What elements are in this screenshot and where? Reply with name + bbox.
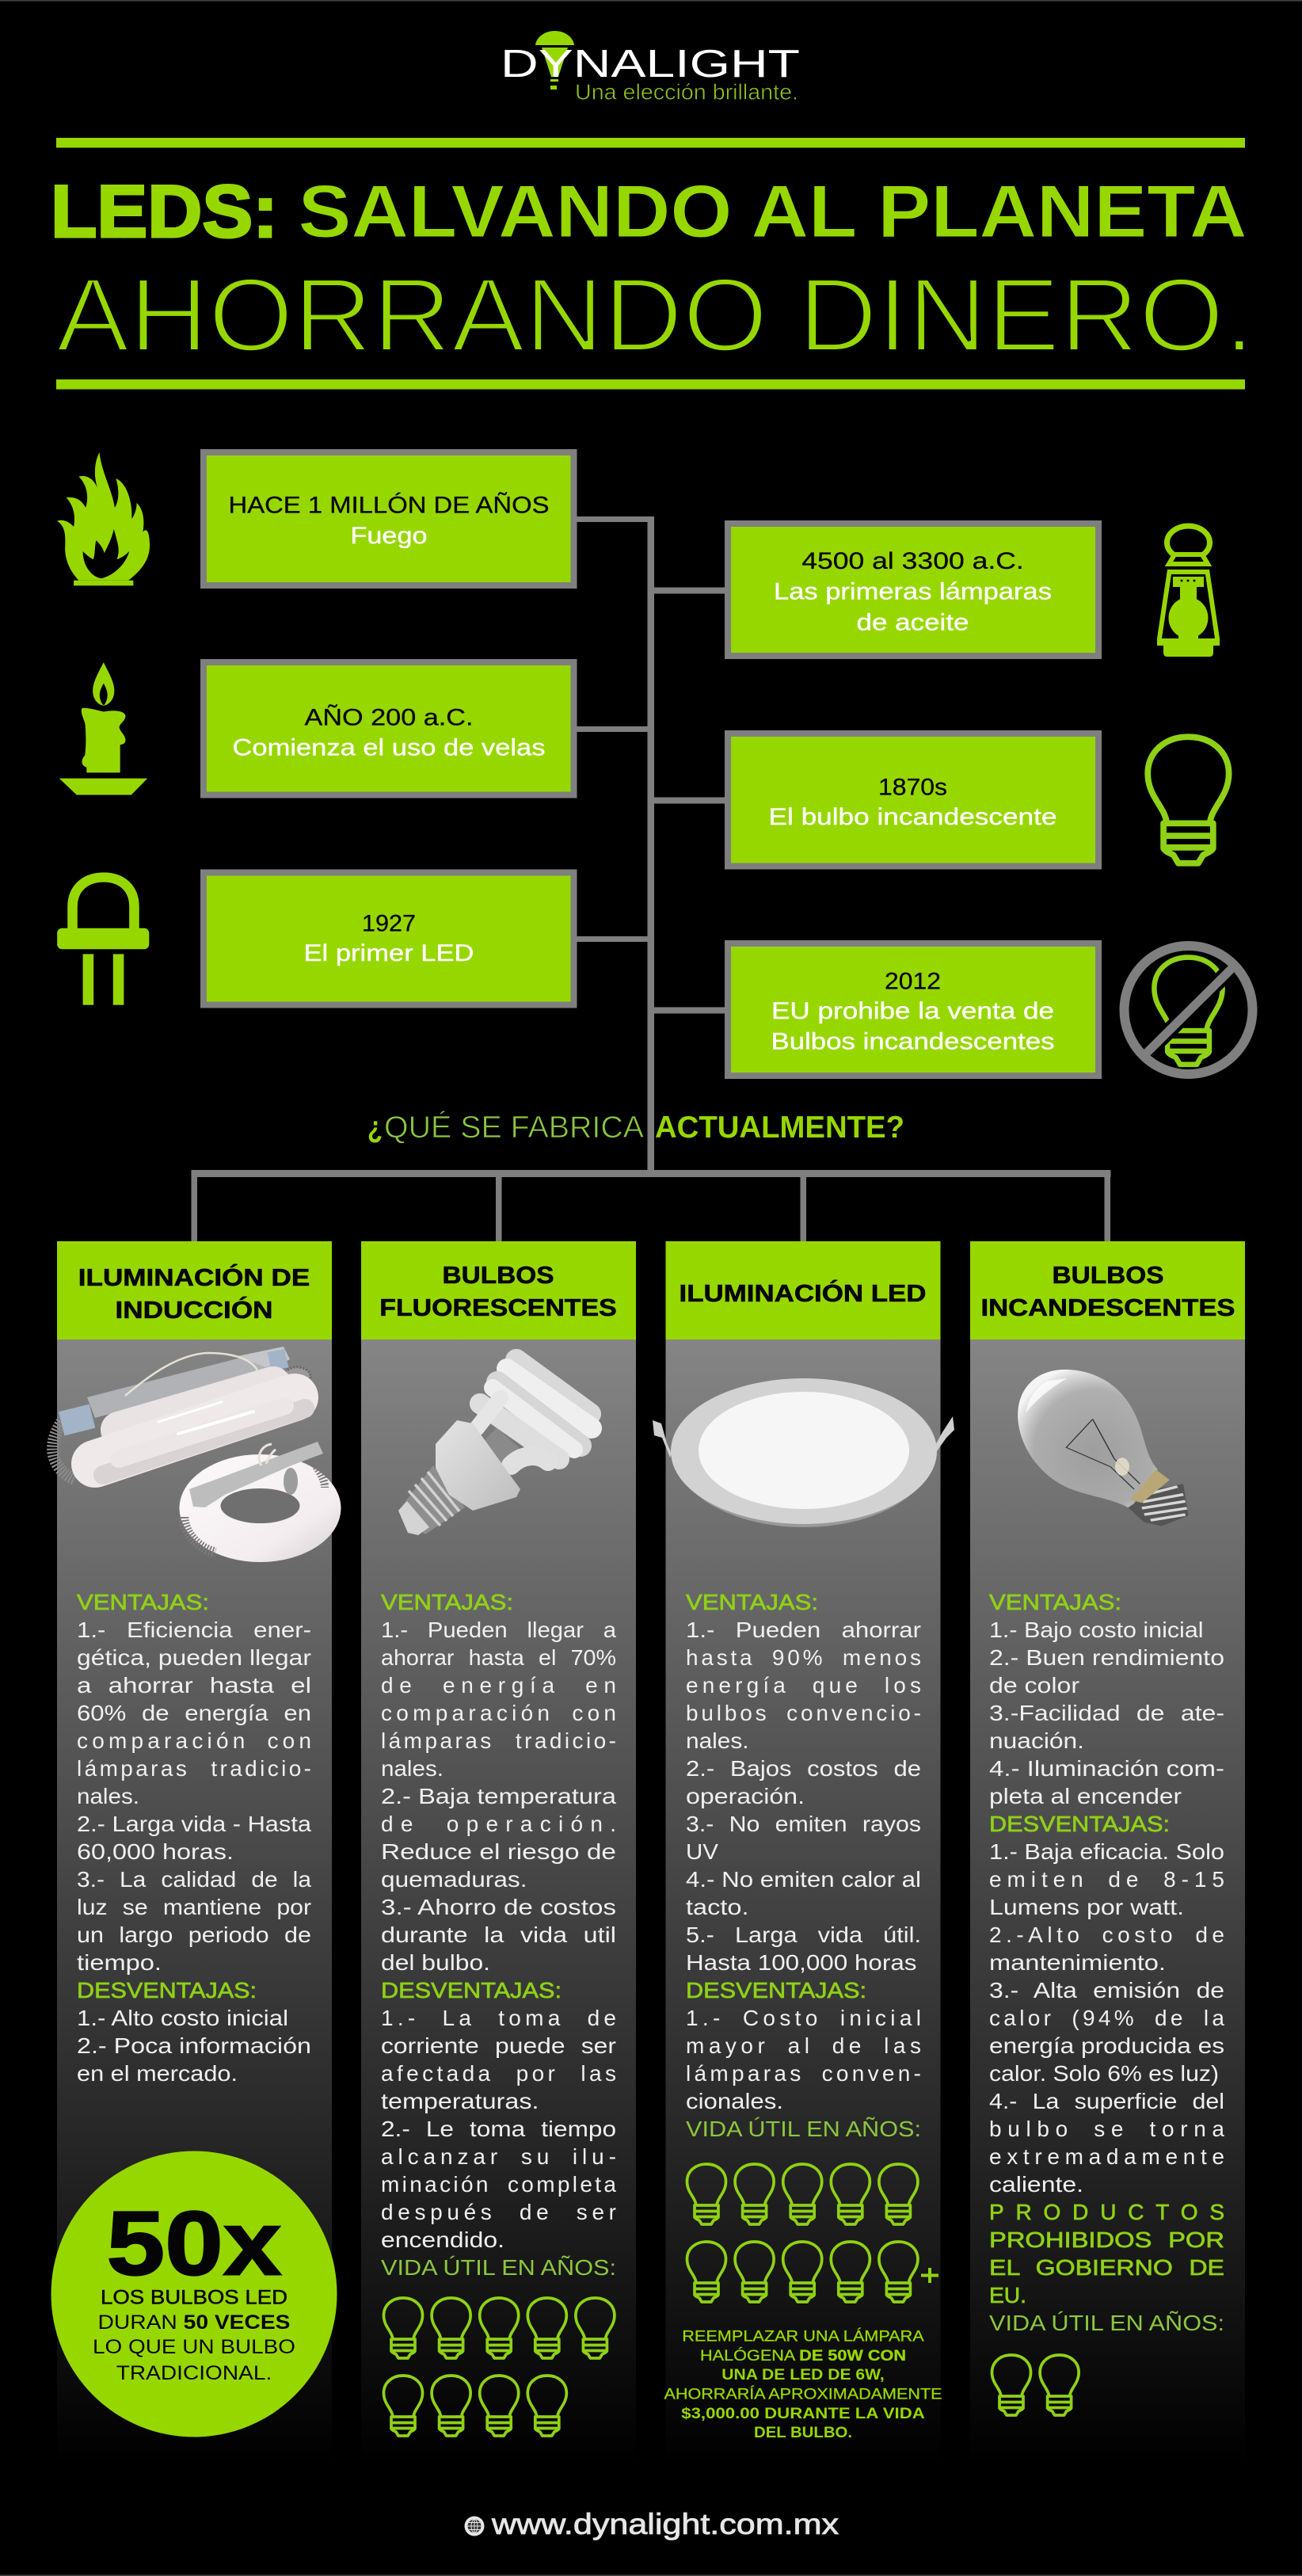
panel: iluminación de inducción: [51, 1241, 341, 2464]
text: ventajas y desventajas: alcanzar su ilu-: [381, 2144, 616, 2169]
title line 1: SALVANDO AL PLANETA: [298, 170, 1247, 253]
text: ventajas y desventajas: 2.-Alto costo de: [989, 1922, 1224, 1947]
icon row: 10+ bulbs: [687, 2164, 938, 2302]
panel: 4500 al 3300 a.C.: de aceite: [857, 610, 969, 635]
text: ventajas y desventajas: tiempo.: [77, 1950, 162, 1975]
callout: reemplazar halógena: UNA DE LED DE 6W,: [721, 2367, 885, 2384]
text: ventajas y desventajas: energía producida es: [989, 2033, 1224, 2058]
text: ventajas y desventajas: hasta 90% menos: [686, 1645, 921, 1670]
panel: 4500 al 3300 a.C.: 4500 al 3300 a.C.: [801, 548, 1024, 574]
text: ventajas y desventajas: 3.- La calidad de la: [77, 1867, 311, 1892]
url text: www.dynalight.com.mx: [491, 2508, 839, 2540]
panel: 4500 al 3300 a.C.: [728, 524, 1098, 656]
panel: año 200 a.C.: [204, 662, 573, 795]
text: ventajas y desventajas: mantenimiento.: [989, 1950, 1166, 1975]
text: ventajas y desventajas: 2.- Bajos costos de: [686, 1756, 921, 1781]
tagline: Una elección brillante.: [575, 79, 798, 105]
photo: induction lamps: [53, 1347, 341, 1562]
text: ventajas y desventajas: ahorrar hasta el 70%: [381, 1645, 616, 1670]
text: ventajas y desventajas: 2.- Poca información: [77, 2033, 311, 2058]
callout: reemplazar halógena: $3,000.00 DURANTE LA VIDA: [681, 2406, 925, 2422]
column header: INDUCCIÓN: [116, 1295, 272, 1324]
text: ventajas y desventajas: 1.- Eficiencia ener-: [77, 1618, 311, 1642]
text: ventajas y desventajas: calor. Solo 6% es luz): [989, 2061, 1219, 2086]
text: ventajas y desventajas: VIDA ÚTIL EN AÑOS:: [686, 2117, 921, 2141]
text: ventajas y desventajas: 1.- Costo inicial: [686, 2006, 921, 2030]
text: ventajas y desventajas: luz se mantiene por: [77, 1895, 311, 1919]
panel: 1927: 1927: [362, 911, 416, 936]
text: ventajas y desventajas: lámparas tradicio-: [381, 1728, 616, 1753]
callout: 50x: 50x: [106, 2193, 282, 2294]
footer url: [464, 2508, 839, 2540]
title line 1: LEDS:: [51, 170, 278, 253]
column header: [970, 1241, 1245, 1339]
question heading: [367, 1111, 904, 1145]
question heading: QUÉ SE FABRICA: [384, 1111, 644, 1145]
text: ventajas y desventajas: VIDA ÚTIL EN AÑOS:: [989, 2311, 1224, 2335]
text: ventajas y desventajas: mayor al de las: [686, 2033, 921, 2058]
timeline connectors: [192, 516, 1110, 1241]
text: ventajas y desventajas: 4.- La superficie del: [989, 2089, 1224, 2113]
text: ventajas y desventajas: de energía en: [381, 1673, 616, 1698]
column header: INCANDESCENTES: [980, 1294, 1235, 1321]
panel: iluminación led: [653, 1241, 954, 2464]
panel: 1870s: El bulbo incandescente: [768, 804, 1056, 830]
text: ventajas y desventajas: 1.- Pueden ahorrar: [686, 1618, 921, 1642]
text: ventajas y desventajas: 1.- La toma de: [381, 2006, 616, 2030]
text: ventajas y desventajas: lámparas tradicio-: [77, 1756, 311, 1781]
panel: bulbos fluorescentes: [361, 1241, 636, 2464]
column header: BULBOS: [1052, 1261, 1164, 1289]
text: ventajas y desventajas: comparación con: [381, 1701, 616, 1725]
callout: reemplazar halógena: HALÓGENA DE 50W CON: [700, 2347, 906, 2365]
panel: año 200 a.C.: AÑO 200 a.C.: [304, 703, 474, 730]
text: ventajas y desventajas: caliente.: [989, 2172, 1083, 2197]
text: ventajas y desventajas: nuación.: [989, 1728, 1084, 1753]
text: ventajas y desventajas: emiten de 8-15: [989, 1867, 1224, 1892]
column header: BULBOS: [442, 1261, 554, 1289]
text: ventajas y desventajas: comparación con: [77, 1728, 311, 1753]
text: ventajas y desventajas: PROHIBIDOS POR: [989, 2227, 1224, 2252]
text: ventajas y desventajas: 4.- No emiten calor al: [686, 1867, 921, 1892]
text: ventajas y desventajas: del bulbo.: [381, 1950, 490, 1975]
callout: reemplazar halógena: DEL BULBO.: [754, 2425, 852, 2441]
icon: prohibited bulb: [1125, 946, 1253, 1074]
column header: [361, 1241, 636, 1339]
text: ventajas y desventajas: [381, 1590, 616, 2280]
text: ventajas y desventajas: DESVENTAJAS:: [77, 1978, 257, 2002]
text: ventajas y desventajas: 60% de energía en: [77, 1701, 311, 1725]
text: ventajas y desventajas: [989, 1590, 1224, 2335]
text: ventajas y desventajas: bulbo se torna: [989, 2117, 1224, 2141]
text: ventajas y desventajas: Reduce el riesgo de: [381, 1839, 616, 1864]
text: ventajas y desventajas: afectada por las: [381, 2061, 616, 2086]
question heading: ¿: [367, 1111, 383, 1145]
text: ventajas y desventajas: minación completa: [381, 2172, 616, 2197]
callout: reemplazar halógena: AHORRARÍA APROXIMADAMENTE: [664, 2386, 942, 2403]
text: ventajas y desventajas: nales.: [77, 1784, 139, 1808]
text: ventajas y desventajas: DESVENTAJAS:: [686, 1978, 866, 2002]
panel: 1870s: [728, 734, 1098, 867]
text: ventajas y desventajas: EU.: [989, 2283, 1026, 2307]
text: ventajas y desventajas: 2.- Larga vida - Hasta: [77, 1812, 311, 1836]
text: ventajas y desventajas: gética, pueden llegar: [77, 1645, 311, 1670]
panel: año 200 a.C.: Comienza el uso de velas: [233, 735, 545, 760]
text: ventajas y desventajas: 4.- Iluminación com-: [989, 1756, 1224, 1781]
icon: globe: [464, 2516, 485, 2536]
text: ventajas y desventajas: calor (94% de la: [989, 2006, 1224, 2030]
icon: candle: [59, 662, 147, 795]
text: ventajas y desventajas: un largo periodo de: [77, 1922, 311, 1947]
callout: 50x: DURAN 50 VECES: [98, 2311, 290, 2334]
logo: [501, 31, 800, 105]
brand name: DYNALIGHT: [501, 43, 800, 86]
text: ventajas y desventajas: VENTAJAS:: [381, 1590, 513, 1614]
icon: led: [57, 878, 149, 1005]
title line 2: AHORRANDO DINERO.: [56, 257, 1254, 373]
panel: 2012: 2012: [885, 968, 941, 995]
title: [51, 138, 1254, 390]
panel: hace 1 millón de años: [204, 452, 573, 585]
icon: fire: [57, 452, 150, 585]
panel: 1927: [204, 873, 573, 1004]
text: ventajas y desventajas: bulbos convencio-: [686, 1701, 921, 1725]
question heading: ACTUALMENTE?: [655, 1111, 904, 1145]
text: ventajas y desventajas: DESVENTAJAS:: [381, 1978, 562, 2002]
text: ventajas y desventajas: operación.: [686, 1784, 805, 1808]
text: ventajas y desventajas: VENTAJAS:: [77, 1590, 209, 1614]
text: ventajas y desventajas: 5.- Larga vida útil.: [686, 1922, 921, 1947]
icon: logo bulb: [535, 31, 574, 90]
icon: lantern: [1157, 526, 1220, 657]
text: ventajas y desventajas: 60,000 horas.: [77, 1839, 234, 1864]
panel: 2012: EU prohibe la venta de: [771, 998, 1054, 1024]
text: ventajas y desventajas: Lumens por watt.: [989, 1895, 1184, 1919]
photo: incandescent bulb: [1018, 1370, 1189, 1526]
icon: incandescent bulb: [1148, 737, 1229, 863]
text: ventajas y desventajas: durante la vida util: [381, 1922, 616, 1947]
text: ventajas y desventajas: Hasta 100,000 horas: [686, 1950, 917, 1975]
text: ventajas y desventajas: 1.- Pueden llegar a: [381, 1618, 616, 1642]
text: ventajas y desventajas: tacto.: [686, 1895, 749, 1919]
callout: reemplazar halógena: REEMPLAZAR UNA LÁMPARA: [682, 2329, 924, 2345]
callout: 50x: TRADICIONAL.: [116, 2362, 272, 2384]
panel: 4500 al 3300 a.C.: Las primeras lámparas: [774, 578, 1052, 605]
icon row: 2 bulbs: [992, 2355, 1079, 2415]
text: ventajas y desventajas: pleta al encender: [989, 1784, 1182, 1808]
text: ventajas y desventajas: 3.- Alta emisión de: [989, 1978, 1224, 2002]
column header: [57, 1241, 332, 1339]
text: ventajas y desventajas: VENTAJAS:: [686, 1590, 818, 1614]
text: ventajas y desventajas: UV: [686, 1839, 718, 1864]
column header: ILUMINACIÓN LED: [680, 1278, 927, 1307]
text: ventajas y desventajas: nales.: [686, 1728, 749, 1753]
panel: 2012: Bulbos incandescentes: [771, 1028, 1055, 1055]
text: ventajas y desventajas: a ahorrar hasta el: [77, 1673, 311, 1698]
column header: FLUORESCENTES: [379, 1294, 617, 1321]
text: ventajas y desventajas: 2.- Baja temperatura: [381, 1784, 616, 1808]
text: ventajas y desventajas: lámparas conven-: [686, 2061, 921, 2086]
panel: bulbos incandescentes: [970, 1241, 1245, 2464]
text: ventajas y desventajas: de operación.: [381, 1812, 616, 1836]
callout: reemplazar halógena: [664, 2329, 942, 2441]
text: ventajas y desventajas: encendido.: [381, 2227, 504, 2252]
text: ventajas y desventajas: 1.- Alto costo inicial: [77, 2006, 288, 2030]
text: ventajas y desventajas: VENTAJAS:: [989, 1590, 1121, 1614]
text: ventajas y desventajas: 1.- Bajo costo inicial: [989, 1618, 1204, 1642]
text: ventajas y desventajas: 3.- Ahorro de costos: [381, 1895, 616, 1919]
text: ventajas y desventajas: energía que los: [686, 1673, 921, 1698]
text: ventajas y desventajas: 3.-Facilidad de ate-: [989, 1701, 1224, 1725]
text: ventajas y desventajas: [77, 1590, 311, 2086]
panel: 2012: [728, 943, 1098, 1076]
column header: ILUMINACIÓN DE: [78, 1263, 310, 1291]
text: ventajas y desventajas: PRODUCTOS: [989, 2200, 1224, 2224]
text: ventajas y desventajas: en el mercado.: [77, 2061, 238, 2086]
photo: led panel: [653, 1378, 954, 1527]
text: ventajas y desventajas: 2.- Buen rendimiento: [989, 1645, 1224, 1670]
text: ventajas y desventajas: VIDA ÚTIL EN AÑOS:: [381, 2255, 616, 2280]
text: ventajas y desventajas: [686, 1590, 921, 2141]
text: ventajas y desventajas: cionales.: [686, 2089, 783, 2113]
text: ventajas y desventajas: EL GOBIERNO DE: [989, 2255, 1224, 2280]
text: ventajas y desventajas: DESVENTAJAS:: [989, 1812, 1170, 1836]
text: ventajas y desventajas: 3.- No emiten rayos: [686, 1812, 921, 1836]
panel: hace 1 millón de años: HACE 1 MILLÓN DE AÑOS: [228, 491, 550, 518]
icon row: 9 bulbs: [383, 2298, 615, 2436]
callout: 50x: [51, 2151, 337, 2437]
panel: 1927: El primer LED: [304, 940, 474, 966]
text: ventajas y desventajas: 1.- Baja eficacia. Solo: [989, 1839, 1224, 1864]
text: ventajas y desventajas: nales.: [381, 1756, 444, 1781]
callout: 50x: LO QUE UN BULBO: [93, 2336, 295, 2358]
panel: hace 1 millón de años: Fuego: [350, 523, 428, 549]
text: ventajas y desventajas: de color: [989, 1673, 1079, 1698]
text: ventajas y desventajas: después de ser: [381, 2200, 616, 2224]
photo: cfl bulb: [398, 1360, 592, 1535]
panel: 1870s: 1870s: [878, 775, 947, 800]
text: ventajas y desventajas: extremadamente: [989, 2144, 1224, 2169]
text: ventajas y desventajas: corriente puede ser: [381, 2033, 616, 2058]
callout: 50x: LOS BULBOS LED: [101, 2286, 287, 2308]
text: ventajas y desventajas: quemaduras.: [381, 1867, 527, 1892]
text: ventajas y desventajas: temperaturas.: [381, 2089, 539, 2113]
column header: [665, 1241, 941, 1339]
text: ventajas y desventajas: 2.- Le toma tiempo: [381, 2117, 616, 2141]
